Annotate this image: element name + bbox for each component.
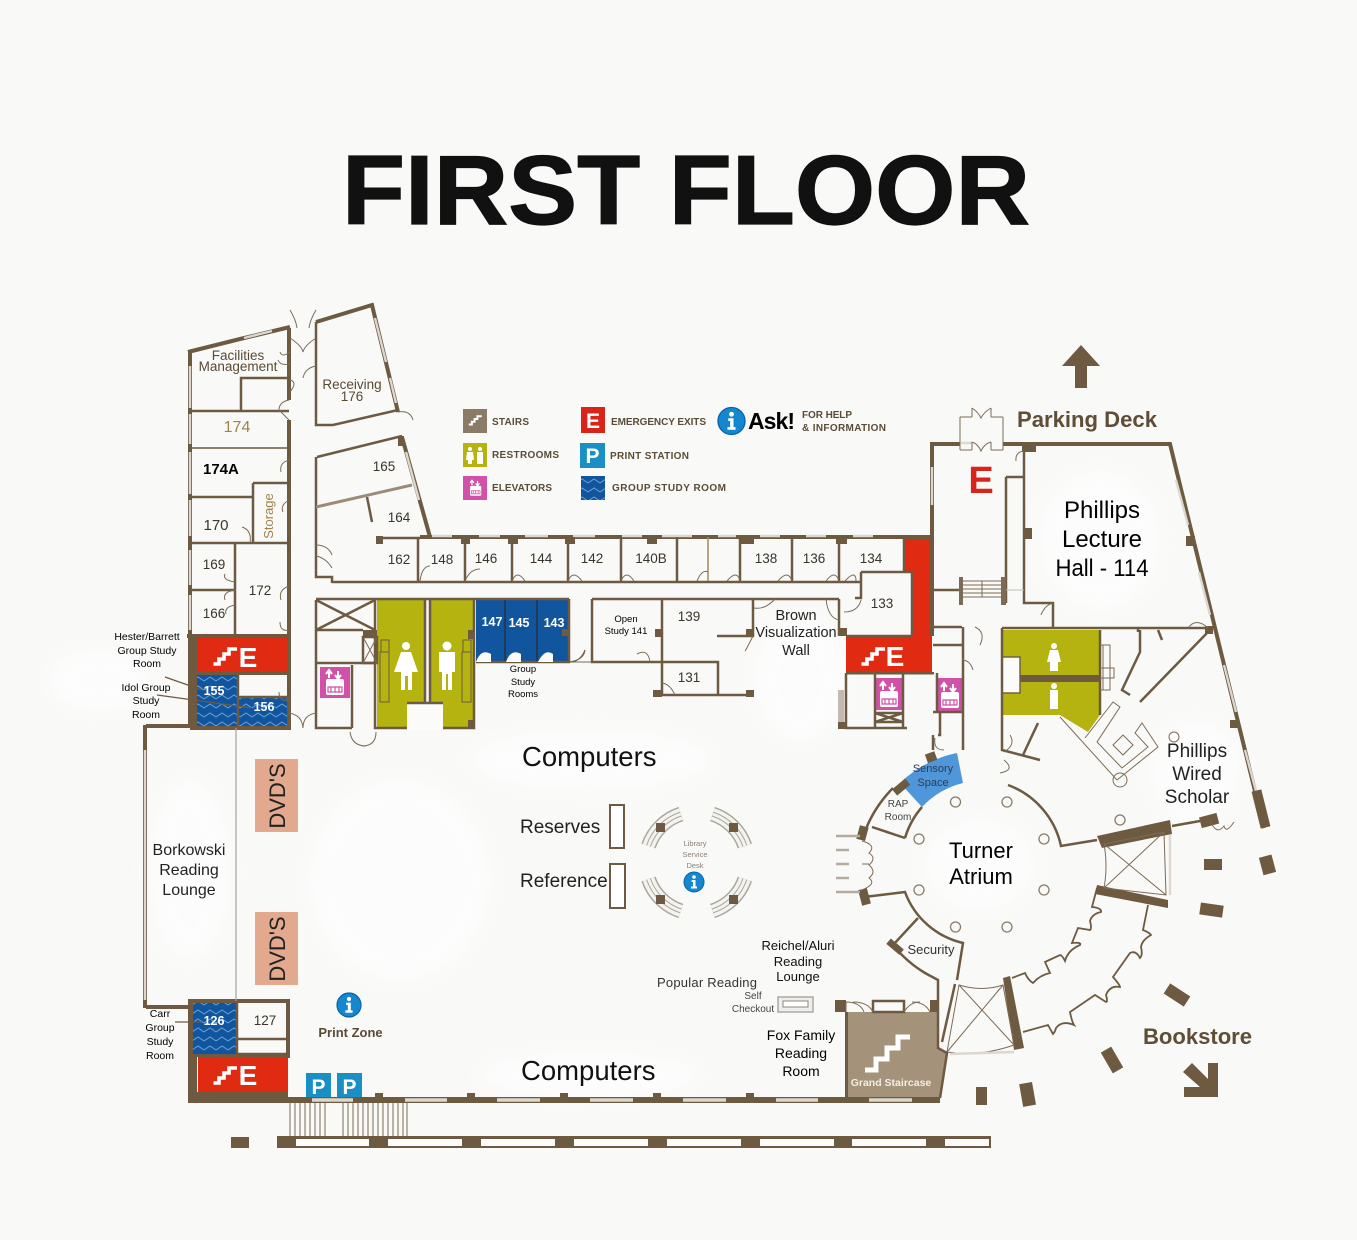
walls: west wing bbox=[187, 327, 291, 730]
room labels: Carr bbox=[150, 1008, 171, 1020]
room labels: 162 bbox=[388, 552, 410, 567]
room labels: Room bbox=[782, 1063, 820, 1079]
room labels: Reference bbox=[520, 871, 608, 892]
DVD shelf lower: DVD'S bbox=[265, 916, 290, 982]
legend: restrooms bbox=[463, 443, 559, 467]
room labels: Wired bbox=[1172, 764, 1222, 785]
room labels: Phillips bbox=[1064, 497, 1140, 524]
room labels: 142 bbox=[581, 551, 603, 566]
room labels: 164 bbox=[388, 510, 411, 525]
leader lines bbox=[157, 677, 252, 1022]
atrium outer door arc bbox=[1023, 905, 1151, 1034]
atrium bbox=[836, 751, 1200, 1054]
room labels: Lounge bbox=[776, 969, 820, 984]
entrance ramps bbox=[290, 1103, 407, 1136]
legend bbox=[463, 407, 886, 500]
group study 145: 145 bbox=[509, 616, 529, 630]
room labels: Fox Family bbox=[767, 1027, 835, 1043]
group study 147 bbox=[476, 599, 505, 662]
room labels: Lounge bbox=[162, 882, 216, 899]
room labels: Group bbox=[145, 1022, 175, 1034]
title: FIRST FLOOR bbox=[342, 135, 1030, 245]
room labels: Reserves bbox=[520, 817, 600, 838]
room labels: Security bbox=[908, 942, 955, 957]
icon: info bbox=[684, 872, 704, 892]
room labels: RAP bbox=[888, 799, 909, 810]
print station P: P bbox=[342, 1076, 357, 1099]
reserves shelf bbox=[610, 805, 624, 848]
DVD shelf lower bbox=[255, 912, 298, 985]
room labels: Study 141 bbox=[605, 626, 647, 637]
atrium inner door arc bbox=[1012, 888, 1101, 983]
room labels: Atrium bbox=[949, 864, 1013, 889]
room labels: 140B bbox=[635, 551, 667, 566]
walls: east wing bbox=[930, 408, 1264, 828]
room labels: Room bbox=[133, 658, 161, 670]
legend: ask for help bbox=[718, 408, 886, 434]
room labels: 174A bbox=[203, 461, 239, 478]
room labels bbox=[114, 348, 1230, 1086]
legend: emergency exits: EMERGENCY EXITS bbox=[611, 417, 706, 428]
legend: stairs: STAIRS bbox=[492, 417, 529, 428]
service desk bbox=[610, 805, 745, 911]
central stair bbox=[959, 577, 1006, 605]
group study 155: 155 bbox=[204, 684, 224, 698]
restroom: east women bbox=[1002, 630, 1100, 675]
room labels: 148 bbox=[431, 552, 453, 567]
library service desk label: Desk bbox=[686, 861, 704, 870]
room labels: 127 bbox=[254, 1013, 276, 1028]
walls: south and reading lounge bbox=[145, 725, 991, 1148]
restroom: east men bbox=[1002, 682, 1100, 732]
elevator: center bbox=[875, 678, 903, 710]
room labels: 138 bbox=[755, 551, 777, 566]
room labels: Room bbox=[146, 1050, 174, 1062]
group study 126 bbox=[193, 1001, 237, 1054]
room labels: 172 bbox=[249, 583, 271, 598]
DVD shelf upper bbox=[255, 759, 298, 832]
label: parking deck: Parking Deck bbox=[1017, 407, 1158, 432]
legend: stairs bbox=[463, 409, 529, 433]
emergency stair: central: E bbox=[886, 641, 904, 672]
legend: ask for help: & INFORMATION bbox=[802, 423, 886, 434]
sensory space: Sensory bbox=[913, 763, 954, 775]
library service desk label: Service bbox=[682, 850, 708, 859]
group study 156 bbox=[239, 697, 288, 728]
room labels: 146 bbox=[475, 551, 497, 566]
room labels: E bbox=[968, 460, 994, 502]
group study 143: 143 bbox=[544, 616, 564, 630]
room labels: Study bbox=[147, 1036, 174, 1048]
room labels: Print Zone bbox=[318, 1025, 383, 1040]
room labels: Turner bbox=[949, 838, 1013, 863]
room labels: Visualization bbox=[755, 625, 837, 641]
room labels: 170 bbox=[203, 517, 229, 534]
elevator: west bbox=[320, 667, 350, 698]
restroom: men bbox=[430, 600, 474, 728]
atrium south vestibule bbox=[942, 976, 1024, 1054]
group study 156: 156 bbox=[254, 700, 274, 714]
group study 143 bbox=[537, 599, 569, 662]
grand staircase bbox=[845, 1012, 947, 1098]
legend: restrooms: RESTROOMS bbox=[492, 450, 559, 461]
grand staircase: Grand Staircase bbox=[851, 1077, 931, 1089]
group study 155 bbox=[192, 675, 238, 728]
group study 147: 147 bbox=[482, 615, 502, 629]
room labels: Study bbox=[511, 677, 535, 688]
room labels: Reading bbox=[775, 1045, 827, 1061]
colored rooms bbox=[192, 539, 1100, 1099]
room labels: Lecture bbox=[1062, 526, 1142, 553]
icon: print zone info bbox=[337, 993, 361, 1017]
room labels: 169 bbox=[203, 557, 225, 572]
walls: north corridor bbox=[316, 536, 932, 697]
legend: print station: P bbox=[585, 445, 600, 468]
room labels: 144 bbox=[530, 551, 553, 566]
restroom: women bbox=[377, 600, 425, 728]
emergency stair: southwest: E bbox=[239, 1060, 257, 1091]
sensory space bbox=[900, 753, 963, 807]
room labels: Group Study bbox=[118, 645, 177, 657]
service desk arcs bbox=[648, 814, 745, 911]
room labels: Facilities bbox=[212, 348, 265, 363]
room labels: Room bbox=[132, 709, 160, 721]
room labels: Study bbox=[133, 695, 160, 707]
room labels: Storage bbox=[261, 493, 276, 539]
legend: group study room: GROUP STUDY ROOM bbox=[612, 483, 726, 494]
legend: emergency exits: E bbox=[586, 410, 600, 433]
walls: center-east block bbox=[838, 627, 963, 750]
room labels: 136 bbox=[803, 551, 825, 566]
emergency stair: northwest bbox=[197, 637, 288, 673]
room labels: Reading bbox=[774, 954, 822, 969]
legend: group study room bbox=[581, 476, 726, 500]
room labels: 166 bbox=[203, 606, 225, 621]
print station P bbox=[337, 1073, 362, 1099]
room labels: Rooms bbox=[508, 689, 538, 700]
room labels: Scholar bbox=[1165, 787, 1230, 808]
room labels: Self bbox=[744, 991, 762, 1002]
door swings bbox=[224, 310, 1234, 830]
legend: ask for help: FOR HELP bbox=[802, 410, 852, 421]
room labels: Computers bbox=[521, 1055, 656, 1086]
room labels: 133 bbox=[871, 596, 893, 611]
self checkout desk bbox=[778, 997, 813, 1012]
print station P bbox=[306, 1073, 331, 1099]
legend: print station bbox=[580, 443, 689, 468]
group study 145 bbox=[505, 599, 537, 662]
room labels: 139 bbox=[678, 609, 700, 624]
room labels: Receiving bbox=[322, 377, 382, 392]
lounge furniture bbox=[1060, 702, 1179, 787]
bottom colonnade bbox=[231, 1136, 991, 1148]
library service desk label: Library bbox=[684, 839, 707, 848]
legend: elevators: ELEVATORS bbox=[492, 483, 552, 494]
room labels: Idol Group bbox=[121, 682, 171, 694]
room labels: Room bbox=[885, 812, 911, 823]
walls: northwest wing bbox=[316, 305, 430, 583]
room labels: Popular Reading bbox=[657, 975, 757, 990]
emergency stair: southwest bbox=[198, 1057, 288, 1092]
room labels: Wall bbox=[782, 643, 810, 659]
room labels: Checkout bbox=[732, 1004, 774, 1015]
room labels: Computers bbox=[522, 741, 656, 772]
legend: elevators bbox=[463, 476, 552, 500]
room labels: Group bbox=[510, 664, 536, 675]
room labels: Hall - 114 bbox=[1056, 555, 1148, 582]
label: bookstore: Bookstore bbox=[1143, 1024, 1252, 1049]
walls: core restrooms bbox=[316, 600, 474, 728]
room labels: Open bbox=[614, 614, 638, 625]
icon: up arrow bbox=[1062, 345, 1100, 388]
emergency stair: northwest: E bbox=[239, 642, 257, 673]
room labels: Phillips bbox=[1167, 741, 1227, 762]
group study 126: 126 bbox=[204, 1014, 224, 1028]
icon: down-right arrow bbox=[1183, 1063, 1218, 1097]
room labels: Reichel/Aluri bbox=[762, 938, 835, 953]
atrium east vestibule bbox=[1095, 820, 1200, 908]
room labels: 176 bbox=[341, 389, 363, 404]
room labels: 174 bbox=[224, 419, 250, 436]
elevator: east bbox=[937, 678, 963, 712]
print station P: P bbox=[311, 1076, 326, 1099]
room labels: Hester/Barrett bbox=[114, 631, 180, 643]
legend: ask for help: Ask! bbox=[748, 408, 795, 434]
DVD shelf upper: DVD'S bbox=[265, 763, 290, 829]
room labels: Borkowski bbox=[153, 842, 225, 859]
room labels: Management bbox=[199, 359, 278, 374]
legend: emergency exits bbox=[581, 407, 706, 433]
room labels: 131 bbox=[678, 670, 700, 685]
library service desk label bbox=[682, 839, 708, 870]
reference shelf bbox=[610, 864, 625, 908]
legend: print station: PRINT STATION bbox=[610, 451, 689, 462]
sensory space: Space bbox=[917, 777, 949, 789]
emergency stair: central bbox=[846, 539, 932, 673]
room labels: Brown bbox=[775, 608, 817, 624]
outdoor columns bbox=[976, 789, 1276, 1107]
room labels: 134 bbox=[860, 551, 883, 566]
room labels: Reading bbox=[159, 862, 219, 879]
room labels: 165 bbox=[373, 459, 395, 474]
